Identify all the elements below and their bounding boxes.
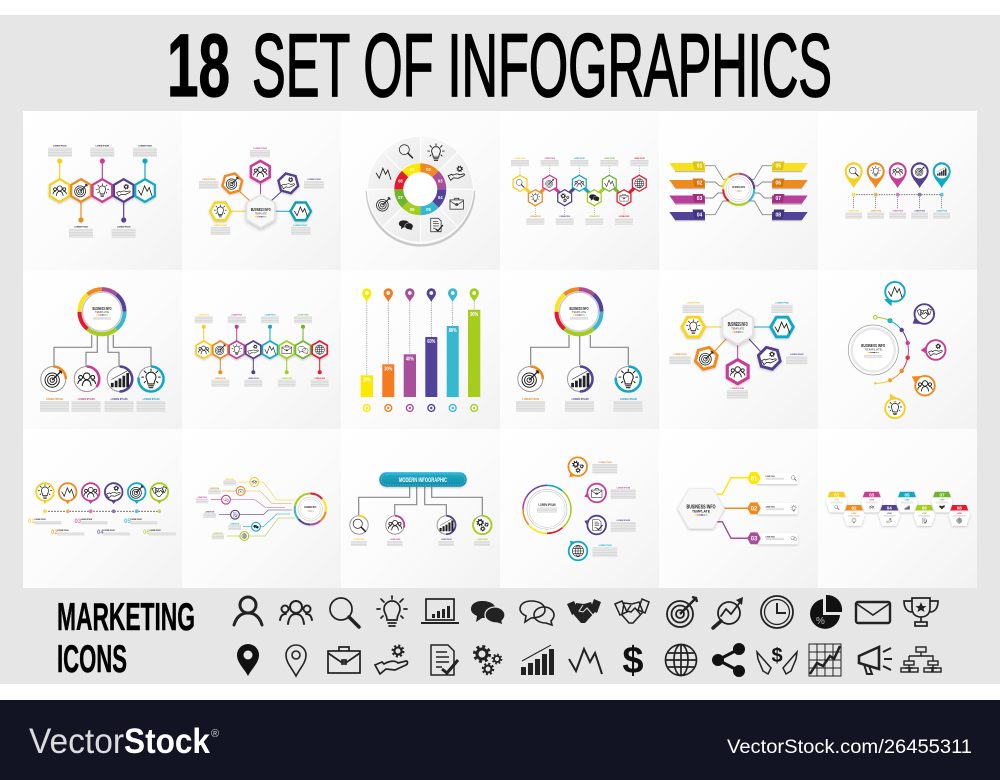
labels	[196, 479, 241, 539]
ring numbers: 01	[410, 167, 415, 172]
text blocks: LOREM IPSUM	[298, 314, 309, 316]
labels: LOREM IPSUM	[477, 539, 488, 541]
tabbed hexagon cards: LOREM	[852, 513, 856, 515]
footer bar	[0, 700, 1000, 780]
cards	[757, 473, 798, 544]
bar values	[363, 312, 479, 384]
labels: LOREM IPSUM	[143, 398, 159, 401]
cards: LOREM IPSUM	[765, 476, 775, 478]
labels: LOREM IPSUM	[210, 488, 219, 490]
numbered legend: LOREM IPSUM	[149, 530, 161, 532]
text blocks: LOREM IPSUM	[687, 302, 700, 304]
panel: large central hexagon with five satellites	[659, 270, 818, 429]
text blocks: LOREM IPSUM	[138, 146, 152, 148]
satellite hexagons	[210, 161, 311, 220]
labels: LOREM IPSUM	[617, 487, 630, 489]
text blocks: LOREM IPSUM	[215, 378, 226, 380]
right ribbons: 07	[776, 196, 781, 202]
labels: LOREM IPSUM	[617, 520, 630, 522]
down arrows	[854, 197, 942, 209]
panel: six bubbles over numbered timeline	[23, 429, 182, 588]
labels: LOREM IPSUM	[46, 398, 63, 401]
labels: LOREM IPSUM	[78, 398, 94, 401]
main circle: TEMPLATE	[572, 310, 586, 314]
number hexagons: 03	[751, 536, 758, 543]
main circle: BUSINESS INFO	[570, 306, 589, 311]
central ring: BUSINESS INFO	[732, 185, 745, 189]
numbered legend: 06	[143, 530, 150, 536]
logo: Stock	[124, 722, 210, 761]
tabbed hexagon cards: 03	[869, 492, 875, 497]
pins	[845, 162, 951, 188]
panel: circle with four speech bubbles	[500, 429, 659, 588]
right ribbons: 06	[776, 180, 781, 186]
bars	[361, 310, 480, 397]
hexagons	[196, 341, 327, 358]
dashed timeline	[854, 194, 942, 196]
text blocks: LOREM IPSUM	[790, 354, 804, 356]
tabbed hexagon cards: LOREM	[922, 513, 927, 515]
logo: ®	[211, 728, 219, 740]
text blocks: LOREM IPSUM	[96, 146, 109, 148]
icons	[198, 344, 324, 355]
right ribbons: 08	[776, 212, 781, 218]
bar values: 60%	[427, 339, 436, 345]
heading: marketing icons: MARKETING	[57, 596, 195, 639]
labels	[40, 398, 166, 412]
ring numbers: 02	[426, 167, 431, 172]
converging lines	[211, 482, 295, 536]
right ribbons	[772, 162, 808, 221]
bar values: 20%	[363, 378, 371, 384]
bar values: 40%	[406, 356, 414, 362]
panel: hexagon row with five icons	[23, 111, 182, 270]
text blocks: LOREM IPSUM	[731, 388, 744, 390]
main hexagon	[678, 489, 724, 529]
cards: LOREM IPSUM	[765, 536, 775, 538]
labels	[516, 398, 642, 412]
centre hexagon	[722, 309, 753, 344]
panel: five location pins on a timeline	[818, 111, 977, 270]
centre hexagon: BUSINESS INFO	[728, 322, 748, 328]
text blocks: LOREM IPSUM	[265, 314, 276, 316]
hexagons	[50, 179, 155, 202]
tabbed hexagon cards: LOREM	[940, 500, 944, 502]
satellite icons	[214, 167, 308, 217]
central ring	[723, 174, 754, 205]
four sub circles	[41, 366, 163, 392]
logo	[29, 722, 219, 761]
panel: segmented circle diagram	[341, 111, 500, 270]
numbered legend	[28, 519, 176, 536]
ring numbers: 07	[398, 195, 403, 200]
text blocks	[669, 302, 807, 399]
banner: MODERN INFOGRAPHIC	[399, 477, 447, 484]
tabbed hexagon cards: 05	[904, 492, 910, 497]
main hexagon: TEMPLATE	[692, 510, 711, 514]
image id: VectorStock.com/26455311	[727, 736, 972, 758]
tabbed hexagon cards: 06	[922, 506, 927, 511]
numbered legend: LOREM IPSUM	[81, 519, 93, 521]
connectors	[704, 327, 772, 360]
connectors	[359, 487, 482, 515]
text blocks: LOREM IPSUM	[314, 378, 326, 380]
panel: converging lines into ring	[182, 429, 341, 588]
text blocks: LOREM IPSUM	[619, 216, 630, 218]
central circle: BUSINESS INFO	[861, 343, 885, 349]
cards: LOREM IPSUM	[765, 506, 775, 508]
left ribbons: 02	[697, 180, 702, 186]
title: 18	[167, 15, 230, 115]
left ribbons	[669, 162, 705, 221]
icon row two	[237, 640, 941, 682]
main circle: LOREM IPSUM	[538, 503, 556, 507]
tabbed hexagon cards: LOREM	[834, 500, 839, 502]
numbered legend: 05	[124, 519, 131, 525]
centre hexagon: TEMPLATE	[255, 212, 267, 216]
text blocks: LOREM IPSUM	[281, 378, 293, 380]
panel: percentage bar chart	[341, 270, 500, 429]
numbered legend: LOREM IPSUM	[130, 519, 142, 521]
numbered legend: LOREM IPSUM	[34, 519, 46, 521]
text blocks	[199, 148, 324, 235]
bottom target dots	[363, 405, 478, 411]
bar values: 80%	[449, 328, 457, 334]
tabbed hexagon cards: 01	[834, 492, 840, 497]
labels: LOREM IPSUM	[225, 479, 234, 481]
text blocks	[195, 314, 329, 387]
labels: LOREM IPSUM	[354, 539, 365, 541]
arc dots	[874, 316, 910, 384]
labels: LOREM IPSUM	[390, 539, 401, 541]
numbered legend: 03	[74, 519, 82, 525]
three sub circles	[518, 366, 641, 392]
numbered legend: LOREM IPSUM	[57, 530, 69, 532]
text blocks: LOREM IPSUM	[544, 158, 556, 160]
stems and dots	[57, 158, 148, 223]
number hexagons: 01	[751, 475, 758, 482]
panel: ribbons around a central ring	[659, 111, 818, 270]
text blocks: LOREM IPSUM	[515, 158, 526, 160]
left ribbons: 01	[697, 164, 702, 170]
heading: marketing icons	[57, 596, 195, 681]
tabbed hexagon cards: 04	[887, 506, 892, 511]
satellite hexagons	[682, 317, 793, 384]
panel: org chart with three circles	[500, 270, 659, 429]
timeline dots	[852, 193, 944, 197]
text blocks: LOREM IPSUM	[213, 225, 227, 227]
text blocks: LOREM IPSUM	[673, 354, 687, 356]
text blocks: LOREM IPSUM	[53, 146, 67, 148]
dashed guide lines	[367, 301, 474, 375]
labels	[351, 539, 490, 546]
labels: LOREM IPSUM	[213, 533, 222, 535]
ring numbers: 05	[426, 207, 431, 212]
labels: LOREM IPSUM	[230, 524, 239, 526]
circles	[350, 516, 491, 534]
text blocks: LOREM IPSUM	[307, 179, 321, 181]
left ribbons: 03	[697, 196, 702, 202]
connectors	[705, 166, 772, 215]
banner	[379, 472, 467, 487]
labels: LOREM IPSUM	[620, 398, 637, 401]
panel: central hexagon with five satellites	[182, 111, 341, 270]
text blocks	[511, 158, 648, 225]
labels: LOREM IPSUM	[197, 497, 207, 499]
lower sector shadow	[367, 191, 474, 246]
number hexagons: 02	[751, 506, 758, 513]
dashed stems	[520, 166, 639, 218]
ring numbers: 06	[410, 207, 415, 212]
tabbed hexagon cards: 08	[957, 506, 962, 511]
numbered legend: 02	[51, 530, 58, 536]
tabbed hexagon cards: 07	[939, 492, 945, 497]
bubbles	[36, 483, 168, 504]
speech bubbles	[885, 282, 946, 418]
centre hexagon: TEMPLATE	[731, 326, 744, 330]
text blocks: LOREM IPSUM	[914, 210, 926, 212]
tabbed hexagon cards: LOREM	[905, 500, 909, 502]
numbered legend: 01	[28, 519, 35, 525]
central circle	[848, 325, 898, 375]
heading: marketing icons: ICONS	[57, 638, 127, 681]
labels	[592, 462, 636, 557]
left ribbons: 04	[697, 212, 702, 218]
main circle: BUSINESS INFO	[92, 306, 112, 311]
main circle	[556, 289, 602, 334]
title	[167, 15, 832, 115]
bar values: 90%	[470, 312, 479, 318]
numbered legend: LOREM IPSUM	[103, 530, 115, 532]
hexagons	[513, 175, 646, 206]
stems and dots	[202, 325, 322, 374]
central circle: TEMPLATE	[864, 348, 882, 352]
text blocks: LOREM IPSUM	[248, 378, 259, 380]
text blocks: LOREM IPSUM	[574, 158, 585, 160]
panel: zigzag hexagon chain	[500, 111, 659, 270]
right ribbons: 05	[776, 164, 781, 170]
connectors	[228, 184, 292, 211]
speech bubbles	[568, 457, 606, 560]
text blocks: LOREM IPSUM	[589, 216, 600, 218]
labels: LOREM IPSUM	[205, 512, 214, 514]
icon row two: $	[771, 645, 783, 667]
text blocks: LOREM IPSUM	[74, 226, 88, 228]
main circle: TEMPLATE	[95, 310, 109, 314]
ring: BUSINESS INFO	[304, 505, 316, 509]
tabbed hexagon cards	[826, 492, 970, 526]
text blocks: LOREM IPSUM	[892, 210, 904, 212]
bar values: 30%	[384, 366, 393, 372]
icon row one: %	[816, 616, 825, 627]
labels: LOREM IPSUM	[111, 398, 127, 401]
text blocks: LOREM IPSUM	[775, 302, 789, 304]
connectors	[531, 335, 628, 365]
main hexagon: BUSINESS INFO	[686, 504, 716, 510]
arc segments	[875, 317, 908, 383]
panel: eight tabbed hexagons	[818, 429, 977, 588]
ring numbers: 03	[438, 179, 443, 184]
tabbed hexagon cards: 02	[851, 506, 857, 511]
ring	[288, 487, 332, 531]
sector icons	[376, 144, 464, 232]
connectors	[717, 478, 748, 538]
text blocks: LOREM IPSUM	[848, 210, 860, 212]
labels: LOREM IPSUM	[598, 462, 612, 464]
panel: eight hexagon row	[182, 270, 341, 429]
dashed timeline	[45, 510, 159, 512]
text blocks	[845, 210, 950, 219]
centre hexagon: BUSINESS INFO	[251, 207, 271, 212]
nodes	[222, 478, 260, 540]
text blocks: LOREM IPSUM	[198, 314, 210, 316]
text blocks: LOREM IPSUM	[870, 210, 882, 212]
centre hexagon	[246, 195, 275, 228]
panel: hexagon with three numbered bars	[659, 429, 818, 588]
text blocks: LOREM IPSUM	[253, 148, 267, 150]
panel: semicircle timeline with speech bubbles	[818, 270, 977, 429]
panel: org chart with four circles	[23, 270, 182, 429]
ring numbers	[398, 167, 443, 212]
ring numbers: 08	[398, 179, 403, 184]
text blocks	[48, 146, 157, 238]
text blocks: LOREM IPSUM	[634, 158, 645, 160]
main circle	[80, 289, 124, 334]
icons	[516, 179, 644, 202]
panel: modern infographic banner with circles	[341, 429, 500, 588]
numbered legend: 04	[97, 530, 104, 536]
chain links	[520, 183, 639, 198]
top pins	[362, 288, 479, 302]
colour ring	[394, 163, 446, 215]
number hexagons	[747, 472, 761, 544]
text blocks: LOREM IPSUM	[231, 314, 243, 316]
text blocks: LOREM IPSUM	[604, 158, 615, 160]
text blocks: LOREM IPSUM	[530, 216, 541, 218]
main circle	[523, 485, 571, 533]
eight sectors	[367, 136, 473, 242]
ring numbers: 04	[438, 195, 443, 200]
text blocks: LOREM IPSUM	[293, 225, 307, 227]
labels: LOREM IPSUM	[441, 539, 452, 541]
icon row two: $	[622, 640, 644, 682]
labels: LOREM IPSUM	[598, 545, 612, 547]
satellite icons	[687, 320, 790, 377]
tabbed hexagon cards: LOREM	[869, 500, 874, 502]
icon row one	[234, 595, 938, 629]
tabbed hexagon cards: LOREM	[957, 513, 962, 515]
text blocks: LOREM IPSUM	[202, 179, 216, 181]
labels: LOREM IPSUM	[522, 398, 539, 401]
icons	[53, 184, 152, 197]
timeline dots	[43, 509, 161, 513]
logo: Vector	[29, 722, 124, 761]
text blocks: LOREM IPSUM	[936, 210, 948, 212]
text blocks: LOREM IPSUM	[559, 216, 571, 218]
text blocks: LOREM IPSUM	[117, 226, 131, 228]
labels: LOREM IPSUM	[572, 398, 588, 401]
tabbed hexagon cards: LOREM	[887, 513, 892, 515]
connectors	[54, 335, 151, 367]
